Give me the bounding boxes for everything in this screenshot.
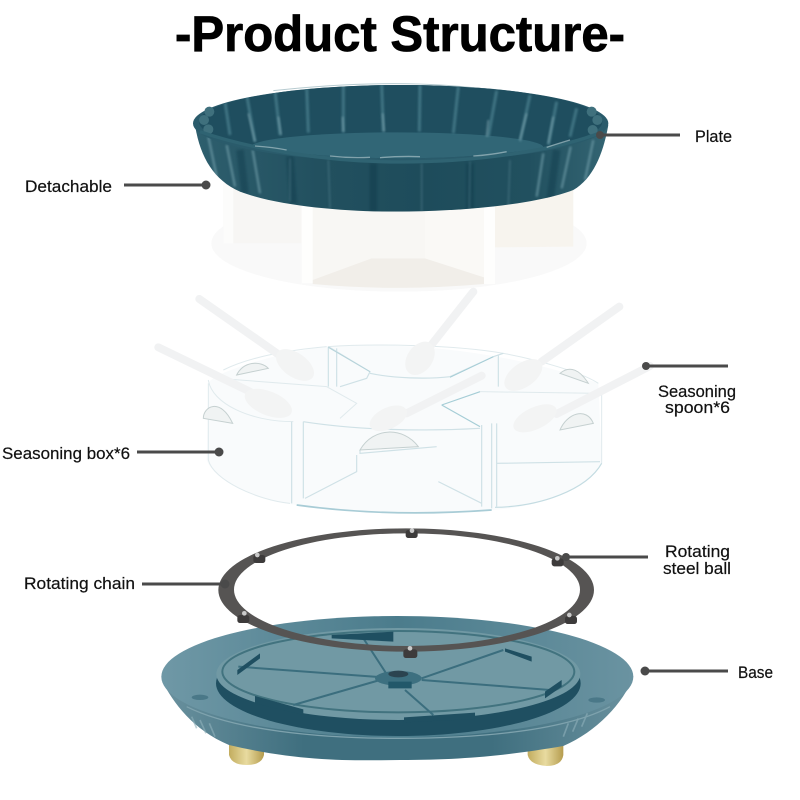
plate <box>190 84 613 217</box>
base <box>161 616 633 766</box>
label: Base <box>640 663 773 682</box>
plate scalloped edge <box>199 107 602 135</box>
label: Base: Base <box>738 663 773 682</box>
rotating chain <box>218 528 594 658</box>
center hub <box>375 671 422 686</box>
label: Seasoning box*6 <box>2 444 224 463</box>
label: Seasoning box*6: Seasoning box*6 <box>2 444 130 463</box>
base body <box>162 677 633 760</box>
label: Plate: Plate <box>695 127 732 146</box>
domes <box>203 363 593 450</box>
label: Rotating steel ball: steel ball <box>663 559 731 578</box>
label: Rotating steel ball <box>562 542 731 578</box>
base rim <box>161 616 633 737</box>
label: Rotating chain <box>24 574 230 593</box>
label: Plate <box>596 127 732 146</box>
white detachable stand <box>211 183 587 292</box>
label: Detachable: Detachable <box>25 177 112 196</box>
seasoning spoons <box>158 292 650 438</box>
raised platform <box>216 631 581 736</box>
plate rim and interior <box>193 85 608 162</box>
label: Seasoning spoon*6: spoon*6 <box>665 398 730 417</box>
label: Seasoning spoon*6: Seasoning <box>658 382 736 401</box>
small feet marks <box>192 695 208 700</box>
title: -Product Structure- <box>175 6 625 62</box>
label: Rotating chain: Rotating chain <box>24 574 135 593</box>
label: Rotating steel ball: Rotating <box>665 542 730 561</box>
label: Seasoning spoon*6 <box>642 362 736 417</box>
plate outer body <box>196 125 608 212</box>
gold feet <box>229 743 264 765</box>
label: Detachable <box>25 177 210 196</box>
seasoning boxes <box>203 345 602 513</box>
